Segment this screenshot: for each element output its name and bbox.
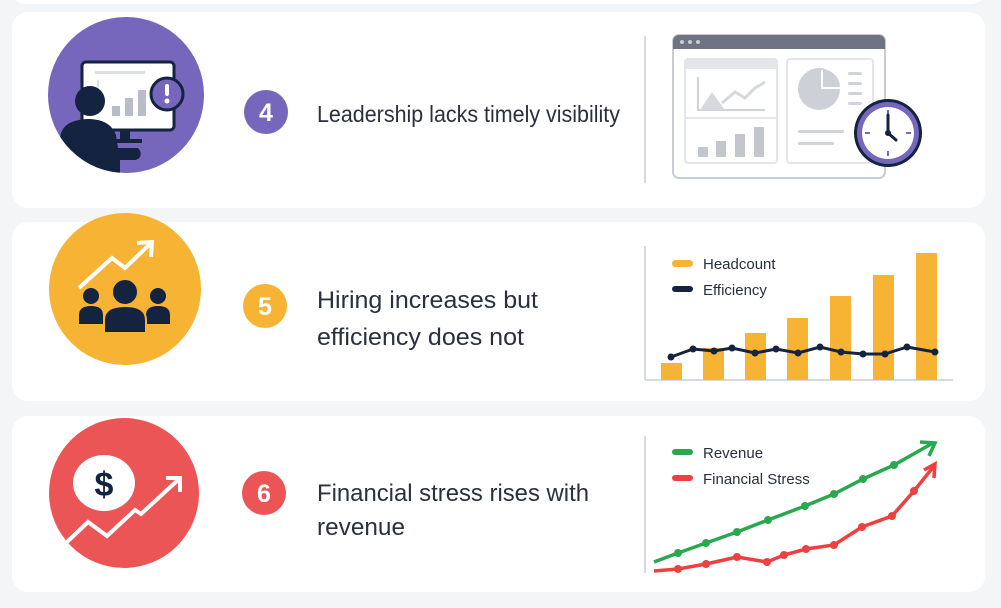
text: financial stress: revenue	[317, 514, 405, 541]
chart: revenue vs financial stress: Financial Stress	[703, 471, 810, 488]
number badge 6: 6	[257, 480, 271, 508]
text: hiring	[317, 287, 538, 351]
panel: card 5 hiring	[12, 213, 985, 401]
chart: headcount vs efficiency: Efficiency	[703, 282, 767, 299]
number badge 5	[243, 284, 287, 328]
number badge 6	[242, 471, 286, 515]
number badge 5: 5	[258, 293, 272, 321]
icon: person at monitor	[48, 17, 204, 185]
text: hiring: efficiency does not	[317, 324, 524, 351]
number badge 4	[244, 90, 288, 134]
panel: card 4 leadership visibility	[12, 12, 985, 208]
icon: dashboard with clock	[673, 35, 922, 178]
icon: dollar growth	[49, 418, 199, 568]
text: leadership: Leadership lacks timely visibility	[317, 101, 620, 127]
panel: card 6 financial stress	[12, 416, 985, 592]
icon: dollar growth: $	[95, 466, 114, 504]
chart: revenue vs financial stress	[645, 436, 935, 573]
chart: headcount vs efficiency: Headcount	[703, 256, 776, 273]
text: financial stress: Financial stress rises with	[317, 480, 589, 507]
text: hiring: Hiring increases but	[317, 287, 538, 314]
number badge 4: 4	[259, 99, 273, 127]
icon: team growth	[49, 213, 201, 365]
chart: headcount vs efficiency	[645, 246, 953, 380]
chart: revenue vs financial stress: Revenue	[703, 445, 763, 462]
text: financial stress	[317, 480, 589, 541]
